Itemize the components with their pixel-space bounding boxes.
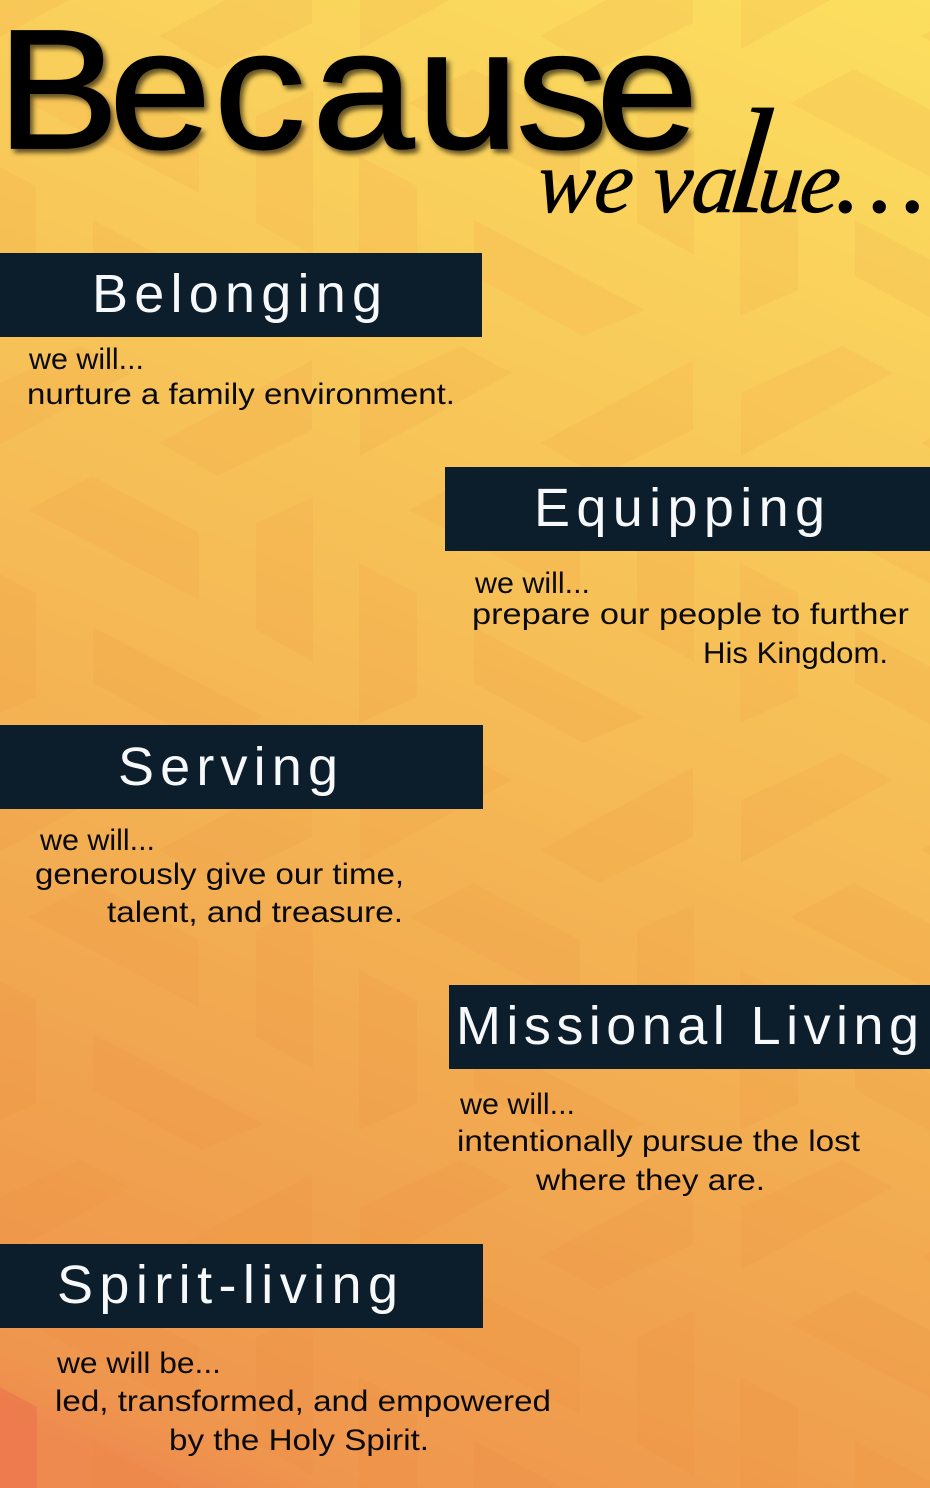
banner: Serving xyxy=(0,725,483,809)
text: Spirit-living commitment xyxy=(55,1347,551,1457)
subtitle: we value...: ... xyxy=(834,113,929,237)
subtitle: we value...: u xyxy=(754,132,809,232)
panel: Serving xyxy=(0,725,483,929)
text: Belonging commitment xyxy=(27,343,455,411)
banner: Missional Living: Missional Living xyxy=(456,996,919,1056)
subtitle: we value...: we xyxy=(533,132,639,232)
text: Serving commitment: we will... xyxy=(39,824,155,857)
text: Belonging commitment: nurture a family environment. xyxy=(27,378,455,411)
text: Serving commitment xyxy=(35,824,404,929)
text: Equipping commitment: prepare our people to further xyxy=(472,598,909,631)
subtitle: we value...: a xyxy=(688,132,743,232)
text: Belonging commitment: we will... xyxy=(28,343,144,376)
banner: Spirit-living: Spirit-living xyxy=(57,1255,398,1315)
text: Spirit-living commitment: led, transformed, and empowered xyxy=(55,1385,551,1418)
subtitle: we value...: v xyxy=(648,132,699,232)
banner: Serving: Serving xyxy=(118,737,338,797)
text: Spirit-living commitment: we will be... xyxy=(56,1347,221,1380)
subtitle: we value... xyxy=(531,78,929,245)
banner: Equipping xyxy=(445,467,930,551)
subtitle: we value...: e xyxy=(796,132,846,232)
banner: Spirit-living xyxy=(0,1244,483,1328)
text: Equipping commitment xyxy=(472,567,909,670)
panel: Missional Living xyxy=(449,985,930,1197)
subtitle: we value...: l xyxy=(721,78,780,245)
text: Missional Living commitment xyxy=(457,1088,861,1197)
text: Equipping commitment: His Kingdom. xyxy=(703,637,888,670)
text: Equipping commitment: we will... xyxy=(474,567,590,600)
panel: Spirit-living xyxy=(0,1244,551,1457)
title: Because xyxy=(0,0,698,185)
banner: Belonging: Belonging xyxy=(92,264,382,324)
text: Missional Living commitment: we will... xyxy=(459,1088,575,1121)
text: Missional Living commitment: intentionally pursue the lost xyxy=(457,1125,861,1158)
text: Serving commitment: talent, and treasure. xyxy=(107,896,403,929)
text: Spirit-living commitment: by the Holy Spirit. xyxy=(169,1424,429,1457)
text: Missional Living commitment: where they are. xyxy=(535,1164,765,1197)
text: Serving commitment: generously give our time, xyxy=(35,858,404,891)
panel: Belonging xyxy=(0,253,482,411)
banner: Belonging xyxy=(0,253,482,337)
banner: Missional Living xyxy=(449,985,930,1069)
banner: Equipping: Equipping xyxy=(534,478,825,538)
panel: Equipping xyxy=(445,467,930,670)
